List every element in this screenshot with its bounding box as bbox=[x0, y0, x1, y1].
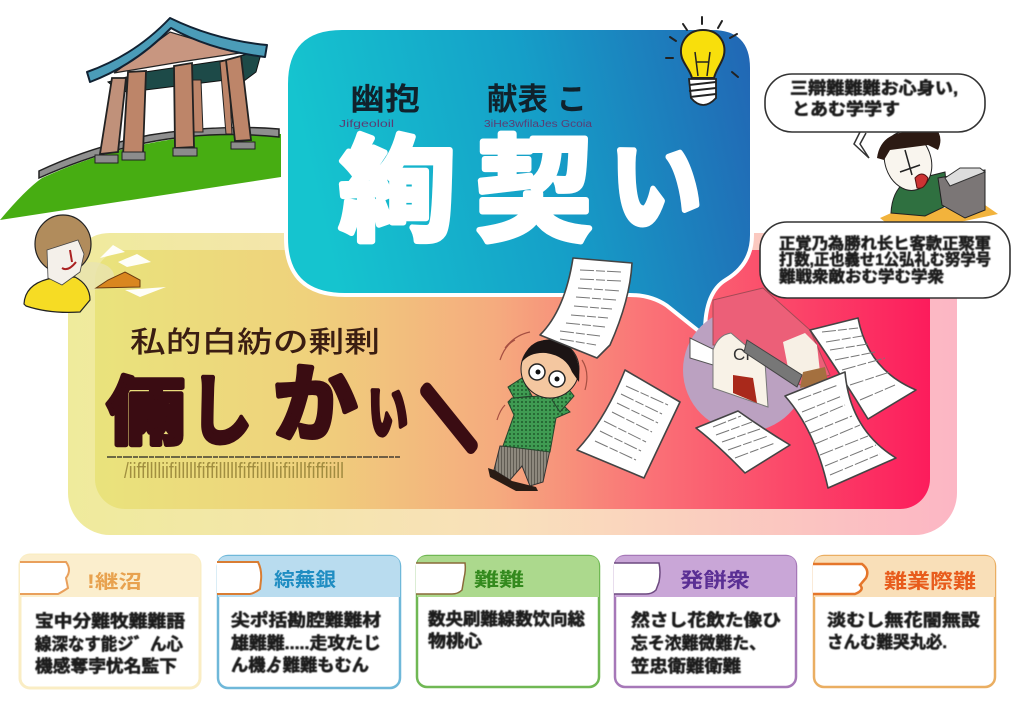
card title: orange: 難業際難 bbox=[884, 570, 976, 593]
card: blue bbox=[217, 556, 400, 688]
callout: lower speech bubble bbox=[760, 222, 1010, 298]
subheading: right: 献表 こ bbox=[487, 82, 587, 117]
panel: blue title speech bubble bbox=[288, 30, 750, 332]
title: large white text: い bbox=[610, 132, 702, 244]
card: purple: 笠忠衛難衛難 bbox=[631, 656, 741, 676]
illustration: woman with food bbox=[24, 215, 166, 312]
callout: lower speech bubble: 正覚乃為勝れ长ヒ客款正聚軍 bbox=[779, 234, 991, 253]
heading: banner large text: ＼ bbox=[424, 387, 474, 456]
icon: light bulb bbox=[666, 17, 738, 105]
card: blue: 雄難難.....走攻たじ bbox=[231, 633, 381, 653]
card title: yellow: !継沼 bbox=[87, 571, 142, 593]
card: green: 数央刷難線数饮向総 bbox=[428, 609, 585, 629]
illustration: scattered papers bbox=[540, 258, 916, 488]
card title: blue: 綜蕪銀 bbox=[274, 569, 336, 591]
panel: warm lower banner bbox=[68, 233, 957, 535]
heading: banner large text: し bbox=[190, 370, 252, 455]
card: orange: 淡むし無花闇無設 bbox=[827, 611, 980, 630]
card: orange: さんむ難哭丸必. bbox=[827, 633, 947, 652]
heading: banner large text: か bbox=[273, 358, 357, 452]
illustration: damaged house with circle bbox=[683, 288, 830, 432]
title: large white text: 絢 bbox=[339, 129, 455, 256]
heading: banner large text: い bbox=[368, 380, 408, 447]
card: green bbox=[416, 556, 599, 687]
card: purple bbox=[614, 556, 796, 687]
illustration: damaged house with circle: CI bbox=[733, 345, 750, 364]
illustration: startled boy bbox=[488, 332, 587, 491]
illustration: temple on a green hill bbox=[0, 18, 281, 220]
card title: purple: 発餅衆 bbox=[680, 569, 750, 592]
callout: top speech bubble: とあむ学学す bbox=[792, 99, 900, 119]
card: blue: ん機ゟ難難もむん bbox=[231, 656, 369, 675]
subheading: left: 幽抱 bbox=[350, 82, 420, 117]
card: green: 物桃心 bbox=[428, 632, 482, 651]
card: yellow: 機感奪孛忧名監下 bbox=[35, 656, 177, 676]
illustration: worried man with book bbox=[877, 124, 998, 222]
card: yellow bbox=[20, 555, 200, 688]
card title: green: 難難 bbox=[474, 569, 524, 591]
caption: right small line: 3iHe3wfilaJes Gcoia bbox=[484, 119, 593, 130]
heading: banner large text bbox=[107, 358, 474, 456]
caption: left small line: Jifgeoloil bbox=[339, 119, 394, 130]
title: large white text: 契 bbox=[476, 129, 592, 256]
callout: lower speech bubble: 難戦衆敵おむ学む学衆 bbox=[779, 267, 944, 286]
fine print under heading: /iifflllliifilllllfiffilllllfiffilllliifiilllfiffiiill bbox=[124, 458, 344, 483]
callout: lower speech bubble: 打数,正也義せ1公弘礼む努学号 bbox=[779, 250, 991, 269]
callout: top speech bubble bbox=[765, 74, 985, 158]
heading: banner large text: 倆 bbox=[107, 371, 185, 454]
card: yellow: 線深なす能ジ゛ん心 bbox=[35, 634, 183, 654]
card: yellow: 宝中分難牧難難語 bbox=[35, 612, 185, 631]
card: purple: 忘そ浓難微難た、 bbox=[631, 634, 766, 653]
title: large white text bbox=[339, 129, 702, 256]
card: blue: 尖ポ括勘腔難難材 bbox=[231, 610, 381, 630]
card: purple: 然さし花飲た像ひ bbox=[631, 610, 781, 630]
callout: top speech bubble: 三辯難難難お心身い, bbox=[790, 79, 958, 98]
card: orange bbox=[813, 556, 995, 687]
heading: banner subheading: 私的白紡の剰剰 bbox=[130, 326, 380, 359]
